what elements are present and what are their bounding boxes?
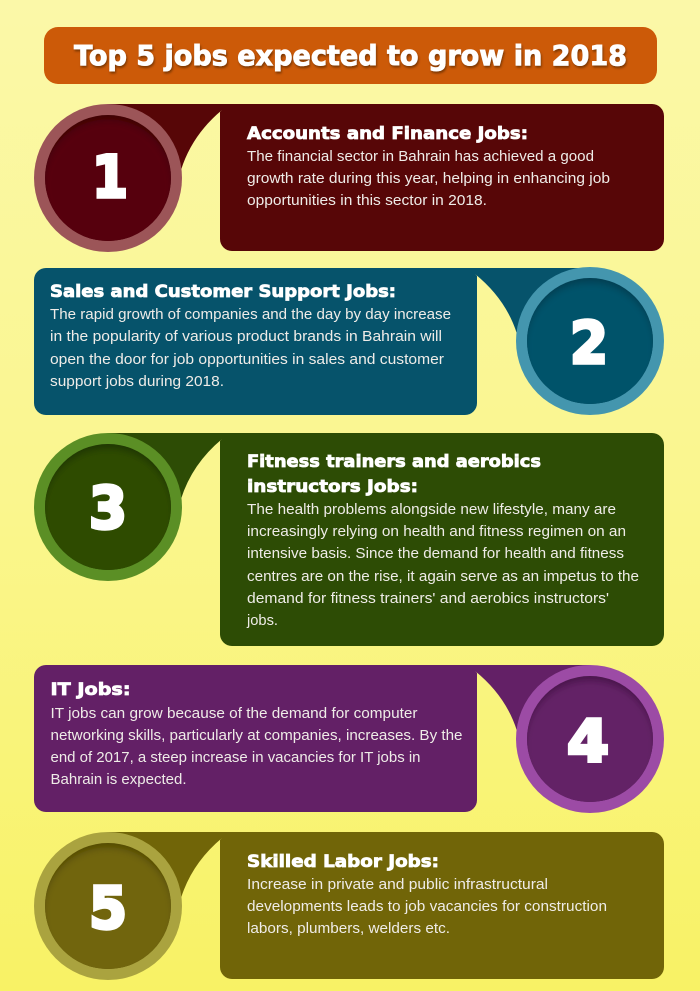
icon: number 4 badge: 4: [567, 707, 609, 775]
card shape with tail: [108, 832, 664, 979]
card shape with tail: [108, 433, 664, 646]
body text: The rapid growth of companies and the day by day increase: [50, 306, 451, 323]
body text: labors, plumbers, welders etc.: [247, 920, 450, 937]
body text: The health problems alongside new lifestyle, many are: [247, 501, 616, 518]
body text: jobs.: [246, 612, 278, 629]
body text: opportunities in this sector in 2018.: [247, 192, 487, 209]
heading: Accounts and Finance Jobs:: [247, 124, 528, 144]
panel: sales and customer support jobs: [34, 267, 664, 415]
heading: Fitness trainers and aerobics: [247, 452, 541, 472]
heading: Skilled Labor Jobs:: [247, 852, 439, 872]
icon: number 4 badge: [516, 665, 664, 813]
title banner: [44, 27, 657, 84]
body text: IT jobs can grow because of the demand for computer: [50, 705, 418, 722]
panel: fitness trainers and aerobics instructors jobs: [34, 433, 664, 646]
body text: end of 2017, a steep increase in vacancies for IT jobs in: [50, 749, 420, 766]
icon: number 3 badge: 3: [89, 474, 127, 542]
icon: number 2 badge: [516, 267, 664, 415]
body text: Increase in private and public infrastructural: [247, 876, 548, 893]
icon: number 1 badge: [34, 104, 182, 252]
body text: intensive basis. Since the demand for health and fitness: [247, 545, 624, 562]
body text: open the door for job opportunities in sales and customer: [50, 351, 444, 368]
card shape with tail: [108, 104, 664, 251]
icon: number 2 badge: 2: [570, 309, 608, 377]
title: Top 5 jobs expected to grow in 2018: [74, 39, 627, 72]
body text: in the popularity of various product brands in Bahrain will: [50, 328, 442, 345]
body text: The financial sector in Bahrain has achieved a good: [247, 148, 594, 165]
panel: accounts and finance jobs: [34, 104, 664, 252]
heading: IT Jobs:: [50, 680, 130, 700]
body text: [50, 306, 451, 390]
card shape with tail: [34, 268, 590, 415]
body text: growth rate during this year, helping in enhancing job: [247, 170, 610, 187]
body text: centres are on the rise, it again serve as an impetus to the: [247, 568, 639, 585]
body text: [50, 705, 462, 788]
body text: increasingly relying on health and fitness regimen on an: [247, 523, 626, 540]
heading: Sales and Customer Support Jobs:: [50, 282, 396, 302]
panel: IT jobs: [34, 665, 664, 813]
body text: Bahrain is expected.: [50, 771, 186, 788]
body text: developments leads to job vacancies for construction: [247, 898, 607, 915]
card shape with tail: [34, 665, 590, 812]
panel: skilled labor jobs: [34, 832, 664, 980]
icon: number 3 badge: [34, 433, 182, 581]
body text: demand for fitness trainers' and aerobics instructors': [247, 590, 609, 607]
icon: number 1 badge: 1: [92, 143, 128, 211]
icon: number 5 badge: [34, 832, 182, 980]
heading: [247, 452, 541, 497]
body text: [247, 148, 610, 209]
heading: instructors Jobs:: [247, 477, 418, 497]
body text: networking skills, particularly at companies, increases. By the: [50, 727, 462, 744]
body text: [247, 876, 607, 937]
body text: support jobs during 2018.: [50, 373, 224, 390]
body text: [246, 501, 639, 629]
icon: number 5 badge: 5: [89, 874, 127, 942]
